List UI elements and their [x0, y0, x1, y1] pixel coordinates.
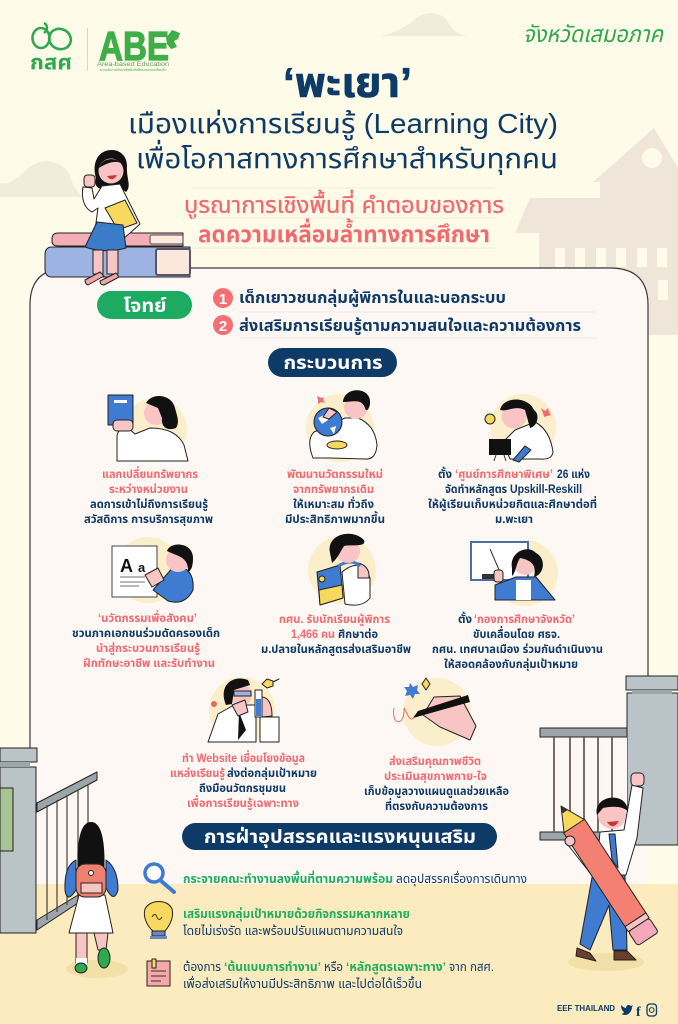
- text: [72, 610, 220, 670]
- icon: hand writing: [394, 678, 476, 746]
- title: ‘พะเยา’: [283, 59, 412, 106]
- item 1: exchange resources: [84, 395, 213, 526]
- icon: person with page: [112, 537, 193, 603]
- heading: overcoming obstacles: [182, 823, 497, 850]
- heading: overcoming obstacles: การฝ่าอุปสรรคและแรงหนุนเสริม: [204, 826, 476, 848]
- logo: ABE Area-based Education: ระบบจัดการศึกษาเชิงพื้นที่เพื่อลดความเหลื่อมล้ำ: [100, 67, 167, 72]
- text: ลดการเข้าไม่ถึงการเรียนรู้: [90, 497, 208, 512]
- text: แลกเปลี่ยนทรัพยากร: [102, 466, 198, 481]
- text: ทำ Website เชื่อมโยงข้อมูล: [182, 750, 305, 766]
- text: ให้สอดคล้องกับกลุ่มเป้าหมาย: [444, 657, 578, 671]
- obstacle 3: หรือ: [324, 960, 343, 974]
- icon: teacher at board: [471, 540, 558, 606]
- problem 1: เด็กเยาวชนกลุ่มผู้พิการในและนอกระบบ: [239, 289, 506, 308]
- text: ส่งต่อกลุ่มเป้าหมาย: [227, 766, 317, 780]
- problem 2: 2: [219, 318, 227, 335]
- item 4: social innovation: [72, 537, 220, 670]
- text: ให้เหมาะสม ทั่วถึง: [293, 496, 374, 511]
- left gate and pillar: [0, 748, 97, 933]
- main panel: [30, 268, 648, 884]
- text: ‘นวัตกรรมเพื่อสังคม’: [98, 610, 197, 625]
- title: เมืองแห่งการเรียนรู้ (Learning City): [128, 108, 558, 141]
- text: [428, 466, 597, 526]
- subtitle: [184, 188, 504, 248]
- text: 26 แห่ง: [557, 467, 590, 481]
- item 5: disabled students: [261, 534, 411, 657]
- icon: magnifier: [145, 864, 174, 892]
- item 7: website: [170, 677, 317, 811]
- text: ที่ตรงกับความต้องการ: [385, 798, 488, 813]
- text: [261, 612, 411, 657]
- problem tag: [97, 291, 192, 319]
- problem 1: 1: [219, 291, 227, 308]
- icon: person with page: A: [120, 556, 133, 576]
- illustration: boy with giant pencil: [551, 773, 659, 971]
- subtitle: บูรณาการเชิงพื้นที่ คำตอบของการ: [184, 189, 504, 220]
- text: ม.พะเยา: [495, 514, 533, 526]
- text: 1,466 คน: [291, 629, 335, 641]
- floor: [0, 884, 678, 1024]
- illustration: books and student sitting: [45, 150, 190, 285]
- title: เพื่อโอกาสทางการศึกษาสำหรับทุกคน: [136, 139, 558, 175]
- text: ม.ปลายในหลักสูตรส่งเสริมอาชีพ: [261, 642, 411, 657]
- text: [84, 466, 213, 526]
- text: [432, 611, 603, 671]
- obstacle 3: จาก กสศ.: [449, 960, 494, 974]
- province tagline: จังหวัดเสมอภาค: [523, 21, 664, 47]
- obstacle 2: เสริมแรงกลุ่มเป้าหมายด้วยกิจกรรมหลากหลาย: [183, 907, 410, 921]
- text: ศึกษาต่อ: [338, 627, 378, 641]
- icon: person with backpack: [308, 534, 376, 605]
- text: ถึงมือนวัตกรชุมชน: [199, 782, 286, 795]
- text: กศน. รับนักเรียนผู้พิการ: [279, 612, 390, 627]
- problem 2: ส่งเสริมการเรียนรู้ตามความสนใจและความต้องการ: [239, 317, 581, 336]
- icon: person holding globe: [306, 390, 377, 462]
- text: เพื่อการเรียนรู้เฉพาะทาง: [187, 795, 299, 811]
- text: ฝึกทักษะอาชีพ และรับทำงาน: [83, 657, 215, 670]
- icon: note: [147, 959, 170, 986]
- text: ‘ศูนย์การศึกษาพิเศษ’: [455, 467, 553, 482]
- logo divider: [87, 28, 88, 71]
- icon: person with page: a: [138, 560, 146, 575]
- text: ระหว่างหน่วยงาน: [109, 482, 188, 496]
- icon: light bulb: [144, 902, 173, 939]
- text: จากทรัพยากรเดิม: [293, 483, 374, 496]
- obstacle 2: [144, 902, 410, 939]
- logo: EEF กสศ: [30, 23, 74, 74]
- footer credit: f: [636, 1005, 641, 1020]
- subtitle: ลดความเหลื่อมล้ำทางการศึกษา: [198, 218, 490, 247]
- icon: person with computer: [485, 394, 556, 462]
- footer credit: EEF THAILAND: [557, 1004, 615, 1013]
- text: ประเมินสุขภาพกาย-ใจ: [384, 770, 487, 783]
- item 6: provincial education division: [432, 540, 603, 671]
- text: แหล่งเรียนรู้: [170, 766, 225, 781]
- obstacle 2: โดยไม่เร่งรัด และพร้อมปรับแผนตามความสนใจ: [183, 924, 403, 938]
- text: สวัสดิการ การบริการสุขภาพ: [84, 513, 213, 526]
- heading: process: กระบวนการ: [284, 353, 383, 374]
- obstacle 3: ‘หลักสูตรเฉพาะทาง’: [346, 960, 446, 975]
- footer credit: [557, 1004, 656, 1020]
- illustration: girl walking with backpack: [65, 822, 128, 978]
- right gate and pillar: [540, 676, 678, 845]
- text: ให้ผู้เรียนเก็บหน่วยกิตและศึกษาต่อที่: [428, 496, 597, 512]
- text: ขับเคลื่อนโดย ศธจ.: [473, 626, 560, 641]
- text: กศน. เทศบาลเมือง ร่วมกันดำเนินงาน: [432, 642, 603, 656]
- obstacle 3: ต้องการ: [183, 960, 221, 974]
- logo: ABE Area-based Education: Area-based Education: [97, 61, 169, 68]
- logo: EEF กสศ: กสศ: [30, 52, 72, 74]
- text: ตั้ง: [438, 466, 452, 481]
- heading: process: [268, 348, 397, 377]
- text: นำสู่กระบวนการเรียนรู้: [96, 641, 200, 656]
- icon: person holding book: [108, 395, 188, 462]
- obstacle 3: ‘ต้นแบบการทำงาน’: [224, 960, 321, 974]
- icon: scientist: [208, 677, 279, 743]
- text: ส่งเสริมคุณภาพชีวิต: [389, 754, 481, 768]
- text: ตั้ง: [458, 611, 472, 626]
- obstacle 1: กระจายคณะทำงานลงพื้นที่ตามความพร้อม: [183, 870, 393, 886]
- text: ‘กองการศึกษาจังหวัด’: [474, 613, 575, 626]
- background school building: [515, 128, 678, 335]
- item 3: special education centre: [428, 394, 597, 526]
- text: พัฒนานวัตกรรมใหม่: [287, 467, 383, 481]
- item 8: quality of life: [364, 678, 509, 813]
- text: ชวนภาคเอกชนร่วมดัดครองเด็ก: [72, 626, 220, 640]
- text: [170, 750, 317, 811]
- problem tag: โจทย์: [124, 296, 167, 317]
- obstacle 1: [145, 864, 527, 892]
- logo: ABE Area-based Education: ABE: [99, 23, 169, 69]
- obstacle 3: [147, 959, 494, 991]
- title: [128, 59, 558, 175]
- text: มีประสิทธิภาพมากขึ้น: [285, 511, 385, 526]
- obstacle 1: ลดอุปสรรคเรื่องการเดินทาง: [396, 870, 527, 886]
- obstacle 3: เพื่อส่งเสริมให้งานมีประสิทธิภาพ และไปต่อได้เร็วขึ้น: [183, 975, 422, 991]
- text: จัดทำหลักสูตร Upskill-Reskill: [445, 483, 582, 497]
- item 2: new innovation: [285, 390, 385, 526]
- text: เก็บข้อมูลวางแผนดูแลช่วยเหลือ: [364, 784, 509, 799]
- text: [364, 754, 509, 813]
- background clouds: [0, 13, 467, 197]
- text: [285, 467, 385, 526]
